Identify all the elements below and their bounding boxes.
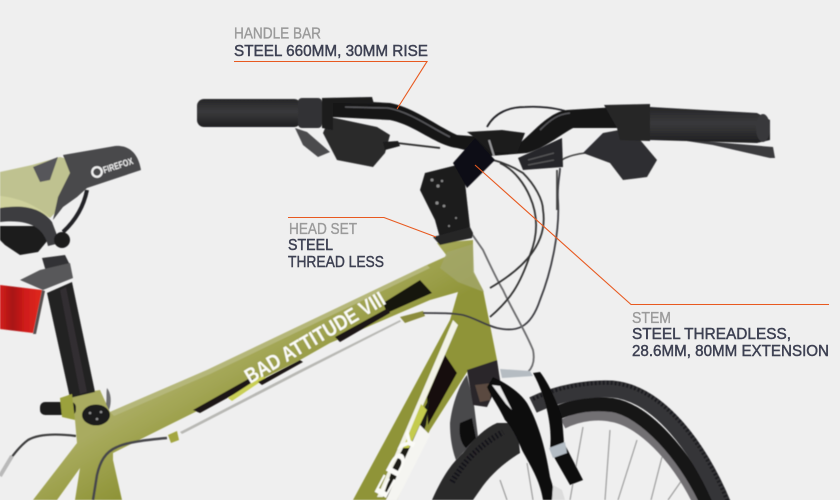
leader line: stem bbox=[475, 165, 829, 304]
saddle logo bbox=[91, 156, 135, 180]
callout: stem: STEM bbox=[632, 310, 671, 327]
seat post and seat clamp bbox=[20, 255, 111, 426]
top tube lettering: BAD ATTITUDE VIII bbox=[241, 288, 390, 388]
left grip and shifter bbox=[197, 97, 400, 167]
handlebar tube bbox=[333, 100, 617, 156]
bicycle photo illustration bbox=[0, 97, 775, 500]
callout: head set: HEAD SET bbox=[289, 221, 357, 238]
callout: handle bar: STEEL 660MM, 30MM RISE bbox=[234, 43, 428, 60]
callout: stem: 28.6MM, 80MM EXTENSION bbox=[632, 343, 829, 360]
front wheel bbox=[432, 375, 729, 500]
callout: head set bbox=[288, 218, 436, 271]
callout: head set: THREAD LESS bbox=[288, 254, 384, 271]
bicycle frame bbox=[33, 240, 497, 500]
saddle logo: FIREFOX bbox=[102, 156, 135, 176]
stem and headset bbox=[420, 130, 525, 245]
rear reflector bbox=[0, 285, 45, 334]
leader line: head set bbox=[288, 218, 436, 237]
callout: handle bar: HANDLE BAR bbox=[234, 26, 321, 42]
saddle bbox=[0, 146, 141, 255]
right grip and shifter bbox=[518, 104, 775, 180]
callout: stem bbox=[475, 165, 829, 360]
handlebar highlight bbox=[345, 107, 570, 137]
callout: stem: STEEL THREADLESS, bbox=[632, 326, 791, 343]
fork and brake bbox=[467, 360, 583, 500]
frame cables bbox=[0, 107, 585, 500]
leader line: handle bar bbox=[234, 62, 427, 109]
callout: handle bar bbox=[234, 26, 428, 109]
callout: head set: STEEL bbox=[288, 237, 333, 254]
